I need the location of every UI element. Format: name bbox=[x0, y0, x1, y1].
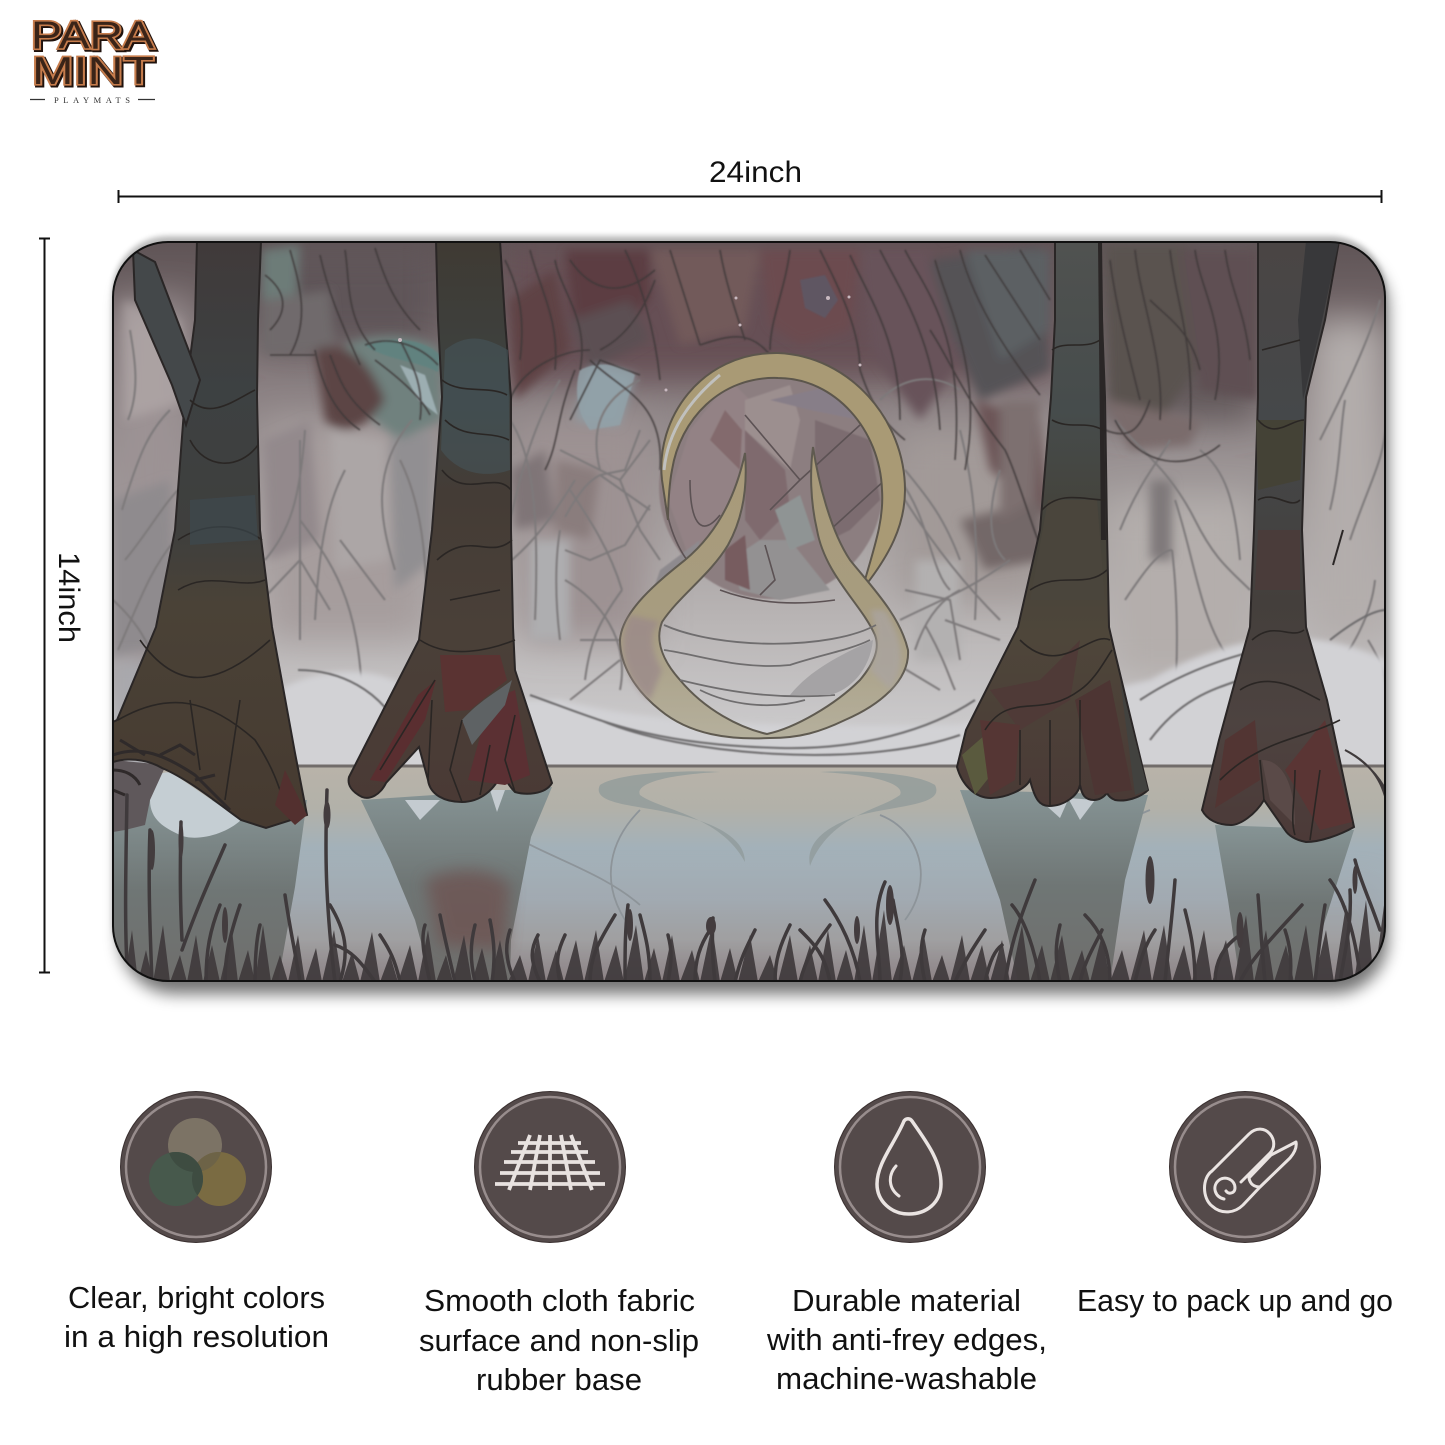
far right reeds leaf bbox=[1345, 750, 1386, 800]
logo: Paramint Playmats: PARA bbox=[32, 16, 156, 59]
playmat border bbox=[113, 242, 1385, 981]
dimension: height 14inch: 14inch bbox=[52, 552, 85, 643]
golden ring and horns emblem bbox=[620, 353, 908, 738]
tree 1 bbox=[113, 241, 307, 828]
icon: colors bbox=[120, 1091, 272, 1243]
dimension: height 14inch bbox=[39, 238, 85, 973]
forest background bbox=[113, 241, 1386, 771]
snow bank bbox=[113, 610, 1386, 770]
tree 4 bbox=[1202, 241, 1354, 842]
thick blades bbox=[126, 790, 1380, 982]
caption: durable: with anti-frey edges, bbox=[766, 1322, 1047, 1357]
caption: colors: in a high resolution bbox=[64, 1319, 329, 1354]
caption: colors: Clear, bright colors bbox=[68, 1280, 325, 1315]
ring inner disc bbox=[650, 375, 885, 603]
caption: durable bbox=[766, 1283, 1047, 1396]
logo: Paramint Playmats bbox=[30, 14, 156, 105]
caption: portable: Easy to pack up and go bbox=[1077, 1283, 1393, 1318]
logo: Paramint Playmats: MINT bbox=[34, 52, 156, 94]
caption: fabric bbox=[419, 1283, 699, 1397]
icon: rolled mat bbox=[1169, 1091, 1321, 1243]
small glowing specks bbox=[398, 296, 862, 392]
tree 2 bbox=[349, 241, 552, 802]
water surface bbox=[113, 765, 1386, 983]
dimension: width 24inch: 24inch bbox=[709, 156, 802, 189]
logo: Paramint Playmats: PLAYMATS bbox=[54, 95, 130, 105]
reflection of emblem bbox=[505, 771, 1150, 920]
lines inside loop bbox=[664, 625, 876, 705]
icon: water drop bbox=[834, 1091, 986, 1243]
logo: Paramint Playmats: MINT bbox=[32, 50, 154, 93]
upper canopy linework bbox=[265, 248, 1250, 560]
caption: fabric: surface and non-slip bbox=[419, 1323, 699, 1358]
caption: fabric: Smooth cloth fabric bbox=[424, 1283, 695, 1318]
playmat artwork bbox=[113, 241, 1386, 983]
pale background trees and branches bbox=[113, 300, 1386, 700]
caption: colors bbox=[64, 1280, 329, 1354]
tree reflections bbox=[113, 760, 1354, 982]
ring arc bbox=[661, 353, 905, 590]
logo: Paramint Playmats: PARA bbox=[31, 14, 154, 58]
cattails bbox=[149, 801, 1358, 948]
icon: fabric grid bbox=[474, 1091, 626, 1243]
caption: durable: Durable material bbox=[792, 1283, 1021, 1318]
dense grass spikes bbox=[118, 900, 1384, 980]
playmat drop shadow bbox=[113, 236, 1388, 994]
grass and reeds foreground bbox=[113, 790, 1386, 982]
horns loop bbox=[620, 447, 908, 738]
dimension: width 24inch bbox=[118, 156, 1382, 203]
tree 3 bbox=[957, 241, 1148, 806]
caption: fabric: rubber base bbox=[476, 1362, 642, 1397]
caption: durable: machine-washable bbox=[776, 1361, 1037, 1396]
